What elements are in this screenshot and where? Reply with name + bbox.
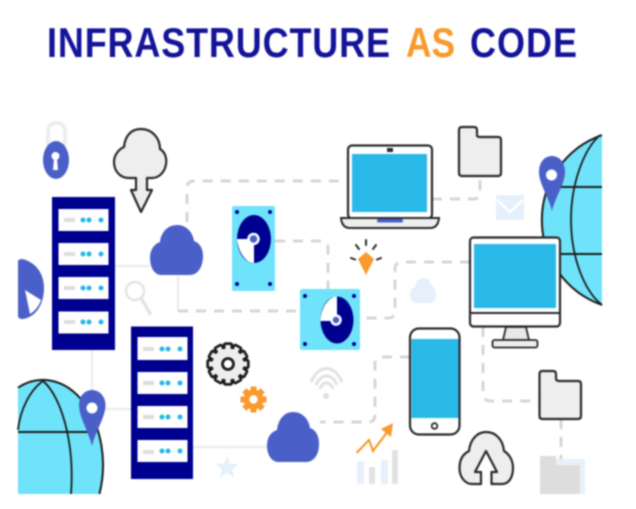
- icon: folder faded: [540, 456, 585, 494]
- icon: cloud download: [114, 129, 166, 212]
- title: AS: [406, 20, 455, 67]
- icon: wifi: [311, 368, 342, 399]
- icon: desktop monitor: [470, 238, 560, 348]
- icon: folder lower: [540, 371, 581, 419]
- icon: map pin right: [539, 156, 565, 211]
- icon: gear large: [209, 345, 247, 383]
- icon: smartphone: [410, 328, 460, 434]
- icon: magnifier: [126, 282, 151, 315]
- icon: star: [216, 456, 238, 478]
- connector lines: [92, 176, 561, 460]
- globe right: [542, 135, 602, 305]
- icon: cloud upload: [460, 432, 513, 484]
- icon: hard disk left: [232, 206, 275, 291]
- icon: cloud blue upper: [150, 225, 203, 275]
- icon: gear orange: [240, 386, 266, 412]
- icon: trend chart: [356, 423, 398, 484]
- icon: pie chart: [18, 259, 44, 319]
- icon: hard disk right: [300, 289, 360, 350]
- title: CODE: [470, 20, 577, 67]
- icon: padlock: [43, 123, 69, 179]
- server rack left: [52, 197, 115, 350]
- icon: cloud blue lower: [267, 412, 319, 462]
- icon: folder top: [459, 127, 501, 176]
- icon: cloud light: [410, 278, 436, 303]
- icon: laptop: [341, 146, 439, 228]
- globe left: [18, 380, 103, 494]
- title: [47, 20, 577, 67]
- title: INFRASTRUCTURE: [47, 20, 390, 67]
- server rack centre: [131, 326, 193, 479]
- icon: map pin left: [79, 390, 106, 446]
- icon: mail: [496, 195, 524, 220]
- icon: light bulb: [351, 240, 381, 275]
